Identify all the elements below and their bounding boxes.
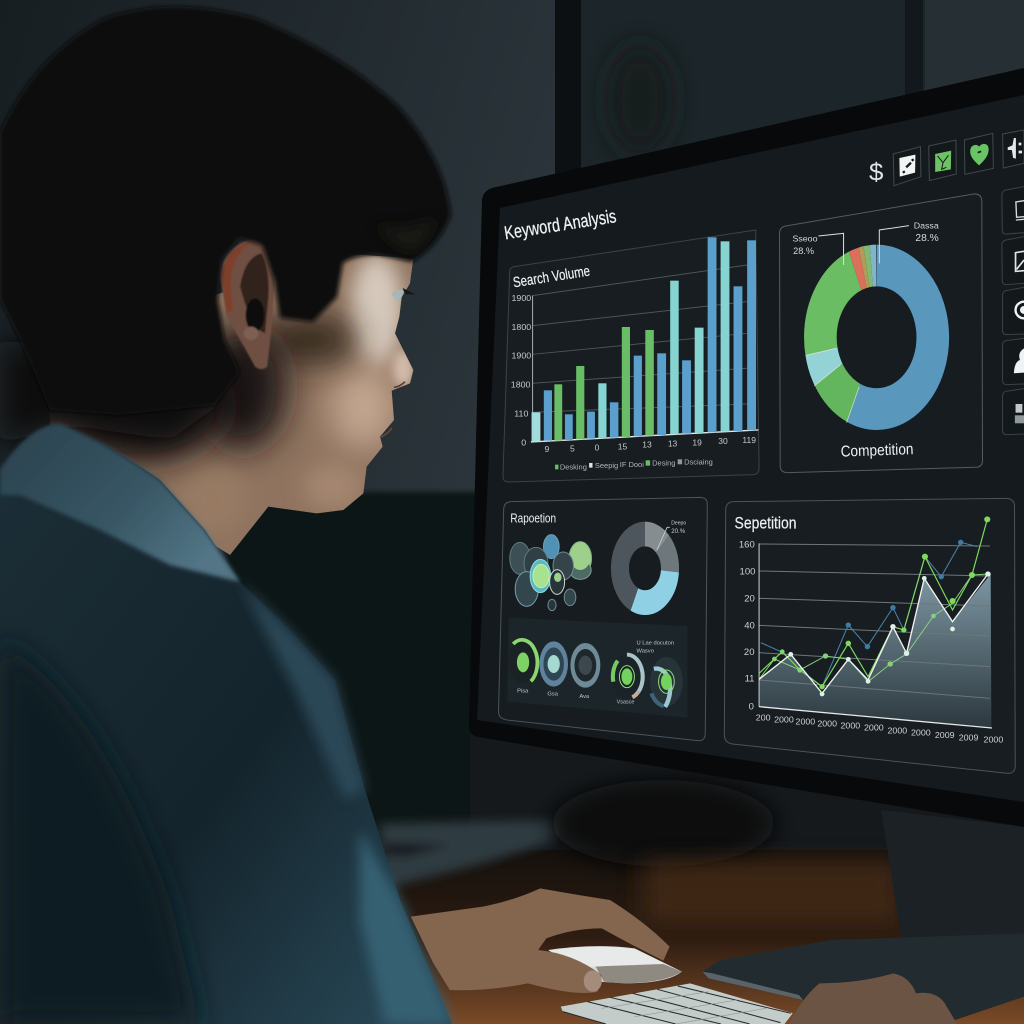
x axis labels: 2000 [841, 721, 860, 731]
x axis labels: 19 [692, 437, 702, 447]
small donut callout: Deepo [671, 521, 686, 527]
icon tile: white document [893, 147, 921, 186]
icon: dollar: $ [869, 159, 883, 187]
x axis labels: 200 [756, 713, 771, 723]
x axis labels [545, 435, 756, 454]
background window frame [555, 0, 1024, 200]
panel: competition [780, 194, 983, 473]
keyboard [561, 983, 793, 1024]
sleeve highlight [360, 830, 452, 1024]
label: Competition: Competition [840, 441, 914, 461]
gauge 2: Gsa [547, 691, 559, 697]
green series [759, 516, 990, 689]
monitor stand [552, 780, 1024, 1020]
ear [220, 238, 275, 369]
gauge 4: Vsasce [617, 699, 634, 705]
icon tile: green heart [964, 133, 993, 174]
white series [759, 571, 991, 696]
desk [380, 850, 1024, 1024]
y axis labels: 110 [514, 409, 529, 419]
shirt lit edge [240, 582, 365, 800]
monitor screen [477, 95, 1024, 802]
y axis labels: 100 [740, 566, 755, 577]
icon tile: partial glyph [1003, 130, 1024, 168]
heading: Repetition: Rapoetion [510, 511, 556, 526]
x axis labels: 2000 [774, 714, 794, 724]
x axis labels: 9 [545, 444, 550, 454]
callout: left [792, 233, 844, 265]
x axis labels: 2009 [959, 732, 979, 742]
face and neck [47, 238, 420, 563]
gauge 1: Pisa [517, 688, 529, 694]
small donut chart [620, 534, 670, 603]
x axis labels: 5 [570, 443, 575, 453]
eye [392, 288, 416, 300]
x axis labels: 2000 [984, 735, 1003, 745]
y axis labels: 20 [744, 646, 754, 657]
lips [380, 428, 392, 437]
callout: left: Sseoo [792, 234, 818, 244]
shoulder and shirt [0, 424, 452, 1024]
gridlines [531, 265, 758, 442]
y axis labels: 1900 [511, 351, 531, 361]
x axis labels: 2000 [911, 728, 931, 738]
x axis labels: 2000 [817, 719, 837, 729]
bubble chart [510, 535, 591, 611]
y axis labels: 1900 [511, 293, 531, 303]
person [0, 6, 452, 1024]
y axis labels [511, 293, 531, 448]
callout: right [879, 220, 939, 263]
donut chart [820, 266, 933, 409]
side icons glyphs [1014, 201, 1024, 423]
gauge 4 [611, 655, 643, 705]
y axis labels: 0 [521, 438, 526, 448]
hand on mouse [411, 888, 670, 993]
y axis labels: 40 [744, 619, 755, 630]
pale green series [759, 574, 988, 682]
side panel: icons [1002, 187, 1024, 435]
heading: Sepetition: Sepetition [735, 513, 797, 532]
gauge 1 [508, 640, 538, 694]
dashboard upper region [503, 130, 1024, 482]
x axis labels: 119 [742, 435, 756, 445]
desk paper blurred [380, 820, 557, 887]
legend: Desking [560, 462, 587, 471]
hands, mouse and keyboard [411, 888, 957, 1024]
legend: Desing [652, 458, 675, 467]
hair [0, 6, 451, 415]
gauge 2 [539, 641, 568, 697]
panel: Sepetition line chart [724, 498, 1015, 773]
gauge 3: Ava [579, 694, 590, 700]
y axis labels: 20 [744, 592, 755, 603]
dark area below monitor [470, 720, 1024, 860]
area under line [759, 574, 991, 727]
gauge 3 [570, 643, 600, 700]
x axis labels: 13 [668, 439, 678, 449]
panel: left Repetition [499, 497, 707, 741]
gauge 5 [646, 657, 683, 707]
shirt shadow fold [0, 640, 200, 1024]
heading: Search Volume: Search Volume [512, 264, 591, 291]
x axis labels [756, 713, 1003, 745]
panel: search volume [503, 230, 759, 482]
hand on keyboard [789, 973, 957, 1024]
x axis labels: 2000 [796, 716, 815, 726]
icon tile: green chart [929, 140, 956, 181]
hair nape fade [0, 340, 225, 445]
blue series [761, 540, 977, 687]
callout: left: 28.% [793, 246, 814, 256]
y axis labels: 1800 [511, 379, 531, 389]
gauge caption: U Lae docuton [636, 640, 674, 646]
gauge caption: Wasvo [636, 648, 654, 654]
legend [555, 457, 713, 471]
gauges sub-panel [507, 618, 688, 718]
x axis labels: 30 [718, 436, 728, 446]
x axis labels: 2000 [888, 725, 907, 735]
x axis labels: 2009 [935, 730, 955, 740]
x axis labels: 15 [618, 441, 628, 451]
y axis labels: 11 [745, 673, 754, 684]
gridlines [759, 543, 992, 728]
mouse [548, 946, 682, 983]
bars [532, 237, 756, 442]
hair highlights [375, 218, 436, 252]
dark furniture behind person [225, 492, 525, 842]
x axis labels: 13 [642, 440, 652, 450]
nostril [394, 382, 405, 387]
y axis labels [739, 538, 755, 711]
x axis labels: 0 [595, 443, 600, 453]
title: Keyword Analysis: Keyword Analysis [503, 205, 618, 243]
monitor bezel [469, 68, 1024, 827]
small donut callout [657, 521, 686, 550]
donut separators [806, 348, 859, 423]
y axis labels: 0 [749, 700, 754, 711]
callout: right: Dassa [914, 220, 939, 230]
y axis labels: 160 [739, 538, 755, 549]
thumb nail [584, 970, 602, 992]
legend: IF Dooi [620, 460, 644, 469]
legend: Seepig [595, 461, 618, 470]
callout: right: 28.% [915, 233, 939, 244]
small donut callout: 20.% [671, 529, 686, 535]
x axis labels: 2000 [864, 723, 884, 733]
legend: Dsciaing [684, 457, 713, 466]
shirt collar [0, 424, 240, 582]
y axis labels: 1800 [511, 322, 531, 332]
gauge caption [636, 640, 674, 654]
dashboard lower region [499, 497, 1015, 773]
